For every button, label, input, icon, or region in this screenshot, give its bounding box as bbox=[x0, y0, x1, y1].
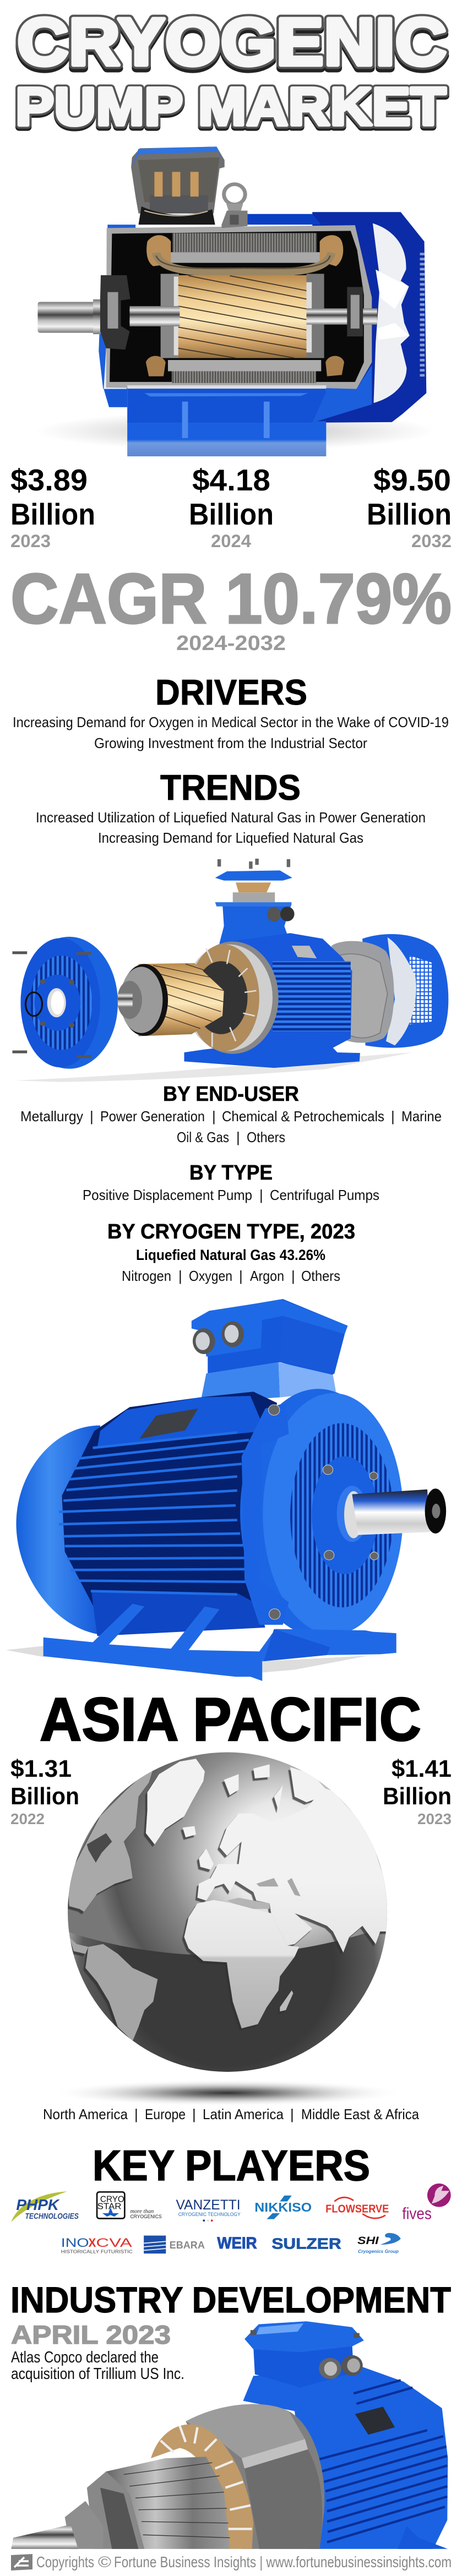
date: April 2023: APRIL 2023 bbox=[11, 2320, 171, 2349]
other regions: | bbox=[290, 2106, 294, 2122]
body bbox=[62, 1391, 277, 1619]
heading: key players: KEY PLAYERS bbox=[93, 2141, 370, 2190]
end-user segments: Metallurgy bbox=[20, 1108, 83, 1125]
logo: Vanzetti: CRYOGENIC TECHNOLOGY bbox=[178, 2212, 241, 2217]
stat: 2032 market size: 2032 bbox=[411, 531, 452, 551]
base bbox=[184, 1039, 360, 1068]
stat: 2022 regional value: Billion bbox=[10, 1783, 79, 1810]
logo: Cryostar: more than bbox=[131, 2208, 154, 2214]
end-user segments: Others bbox=[247, 1129, 285, 1145]
panel: by end-user bbox=[20, 1083, 442, 1145]
end-user segments: | bbox=[236, 1129, 240, 1145]
end-user segments: Marine bbox=[401, 1108, 442, 1125]
type segments: Positive Displacement Pump bbox=[83, 1187, 252, 1203]
base bbox=[44, 1604, 396, 1681]
terminal box bbox=[253, 2343, 354, 2388]
nameplate bbox=[355, 2406, 395, 2435]
development text: Atlas Copco declared the bbox=[11, 2349, 159, 2366]
shaft bbox=[337, 1486, 367, 1542]
stat: 2024 market size: Billion bbox=[189, 497, 274, 531]
title line 2: PUMP MARKET: PUMP MARKET bbox=[15, 79, 446, 139]
stat: 2024 market size: $4.18 bbox=[192, 463, 270, 497]
cryogen segments bbox=[122, 1268, 340, 1284]
leading segment share: Liquefied Natural Gas 43.26% bbox=[136, 1247, 325, 1263]
title line 1: CRYOGENIC: CRYOGENIC bbox=[17, 4, 447, 79]
base bbox=[312, 365, 372, 423]
stator bbox=[187, 942, 279, 1054]
stat: 2032 market size bbox=[367, 463, 452, 551]
stat: 2022 regional value: $1.31 bbox=[10, 1755, 72, 1782]
other regions: Europe bbox=[145, 2106, 186, 2122]
globe bbox=[68, 1753, 388, 2104]
logo: Flowserve bbox=[325, 2197, 389, 2218]
logo: Ebara bbox=[144, 2236, 205, 2253]
fan cover bbox=[362, 934, 448, 1048]
fan cover bbox=[16, 1426, 100, 1635]
icon: Fortune Business Insights logo bbox=[11, 2554, 32, 2570]
type segments: Centrifugal Pumps bbox=[270, 1187, 379, 1203]
logo: Fives: fives bbox=[402, 2205, 432, 2223]
logo: Cryostar: STAR bbox=[97, 2201, 121, 2211]
stat: 2024 market size: 2024 bbox=[211, 531, 251, 551]
other regions: North America bbox=[43, 2106, 128, 2122]
cryogen segments: Argon bbox=[250, 1268, 284, 1284]
logo: Sulzer: SULZER bbox=[271, 2235, 341, 2252]
stat: 2023 market size bbox=[10, 463, 95, 551]
stat: 2023 regional value bbox=[383, 1755, 452, 1827]
terminal box bbox=[208, 1299, 347, 1376]
logo: Cryostar bbox=[97, 2192, 162, 2220]
fan bbox=[373, 223, 410, 403]
title line 2: PUMP MARKET: PUMP MARKET bbox=[15, 77, 446, 137]
logo: Inox CVA: HISTORICALLY FUTURISTIC bbox=[61, 2249, 133, 2255]
terminal box bbox=[131, 146, 225, 214]
end shield bbox=[20, 937, 118, 1069]
body bbox=[243, 2367, 448, 2549]
development text bbox=[11, 2349, 184, 2383]
stat: 2023 regional value: $1.41 bbox=[392, 1755, 452, 1782]
cryogen segments: | bbox=[239, 1268, 243, 1284]
trends text bbox=[36, 809, 426, 846]
end-user segments: | bbox=[212, 1108, 216, 1125]
stat: 2022 regional value: 2022 bbox=[10, 1810, 45, 1827]
logo: Cryostar: CRYO bbox=[100, 2195, 124, 2204]
end-user segments bbox=[20, 1108, 442, 1145]
development text: acquisition of Trillium US Inc. bbox=[11, 2365, 184, 2383]
terminal box bbox=[220, 904, 292, 943]
rotor bbox=[161, 274, 179, 358]
logo: SHI Cryogenics Group bbox=[357, 2233, 401, 2254]
logo: SHI Cryogenics Group: SHI bbox=[357, 2235, 379, 2247]
stat: 2032 market size: Billion bbox=[367, 497, 452, 531]
heading: by cryogen type: BY CRYOGEN TYPE, 2023 bbox=[107, 1220, 355, 1243]
cryogen segments: | bbox=[291, 1268, 295, 1284]
key player logos bbox=[11, 2184, 451, 2255]
cryogen segments: | bbox=[178, 1268, 182, 1284]
logo: Inox CVA: X bbox=[89, 2236, 96, 2250]
logo: Flowserve: FLOWSERVE bbox=[325, 2203, 389, 2215]
title line 1: CRYOGENIC: CRYOGENIC bbox=[17, 4, 447, 79]
heading: drivers: DRIVERS bbox=[155, 672, 307, 712]
logo: Nikkiso bbox=[254, 2196, 312, 2219]
stator bottom bbox=[168, 360, 321, 371]
logo: Inox CVA: CVA bbox=[96, 2236, 132, 2250]
stat: 2023 market size: Billion bbox=[10, 497, 95, 531]
copper windings bbox=[151, 2425, 253, 2549]
drivers text: Growing Investment from the Industrial Sector bbox=[94, 735, 367, 751]
stator bbox=[186, 2404, 324, 2549]
copyright line: Copyrights bbox=[36, 2553, 94, 2570]
other regions: | bbox=[192, 2106, 196, 2122]
trends text: Increasing Demand for Liquefied Natural Gas bbox=[98, 829, 363, 846]
end-user segments: Oil & Gas bbox=[177, 1129, 229, 1145]
globe shadow bbox=[51, 2080, 404, 2106]
logo: Ebara: EBARA bbox=[170, 2240, 205, 2251]
other regions: Latin America bbox=[203, 2106, 284, 2122]
logo: PHPK Technologies: PHPK bbox=[16, 2196, 60, 2213]
image: motor with rotor partly removed bbox=[11, 2321, 448, 2549]
heading: by type: BY TYPE bbox=[189, 1161, 273, 1185]
rotor bbox=[138, 963, 224, 1036]
logo: PHPK Technologies bbox=[11, 2191, 79, 2222]
logo: Inox CVA: INO bbox=[61, 2236, 89, 2250]
nameplate bbox=[139, 1409, 198, 1439]
other regions bbox=[43, 2106, 419, 2122]
end-user segments: | bbox=[391, 1108, 395, 1125]
logo: SHI Cryogenics Group: Cryogenics Group bbox=[358, 2249, 399, 2254]
copyright line: © bbox=[98, 2553, 111, 2570]
heading: asia pacific: ASIA PACIFIC bbox=[40, 1685, 421, 1754]
title bbox=[15, 4, 447, 139]
panel: by cryogen type bbox=[107, 1220, 355, 1284]
stat: 2023 market size: 2023 bbox=[10, 531, 51, 551]
title line 1: CRYOGENIC: CRYOGENIC bbox=[17, 8, 447, 83]
title line 2: PUMP MARKET: PUMP MARKET bbox=[15, 77, 446, 137]
cryogen segments: Others bbox=[301, 1268, 340, 1284]
other regions: Middle East & Africa bbox=[301, 2106, 419, 2122]
other regions: | bbox=[134, 2106, 138, 2122]
type segments: | bbox=[259, 1187, 263, 1203]
body bbox=[220, 933, 352, 1052]
CAGR period: 2024-2032 bbox=[176, 632, 286, 655]
stat: 2032 market size: $9.50 bbox=[373, 463, 451, 497]
image: assembled motor bbox=[6, 1299, 446, 1681]
stator top bbox=[172, 233, 317, 252]
image: cutaway electric motor bbox=[35, 146, 436, 456]
heading: trends: TRENDS bbox=[160, 767, 301, 807]
flange bbox=[240, 1389, 396, 1636]
logo: Vanzetti bbox=[176, 2198, 241, 2222]
heading: by end-user: BY END-USER bbox=[163, 1083, 299, 1106]
bearings bbox=[100, 275, 131, 350]
shaft bbox=[129, 306, 180, 326]
panel: by type bbox=[83, 1161, 379, 1203]
continents bbox=[68, 1759, 390, 2041]
base bbox=[398, 2526, 448, 2549]
cryogen segments: Nitrogen bbox=[122, 1268, 171, 1284]
stat: 2024 market size bbox=[189, 463, 274, 551]
eye bolt bbox=[224, 184, 245, 204]
stat: 2022 regional value bbox=[10, 1755, 79, 1827]
logo: Weir: WEIR bbox=[217, 2234, 257, 2252]
rotor bbox=[106, 2457, 230, 2549]
footer bbox=[11, 2553, 452, 2570]
stat: 2023 regional value: Billion bbox=[383, 1783, 452, 1810]
image: exploded motor bbox=[12, 859, 448, 1082]
end-user segments: Power Generation bbox=[100, 1108, 205, 1125]
type segments bbox=[83, 1187, 379, 1203]
logo: Fives bbox=[402, 2184, 451, 2223]
end-user segments: | bbox=[90, 1108, 94, 1125]
drivers text bbox=[13, 714, 449, 751]
logo: Vanzetti: VANZETTI bbox=[176, 2198, 241, 2213]
logo: Inox CVA bbox=[61, 2236, 133, 2255]
logo: PHPK Technologies: TECHNOLOGIES bbox=[25, 2212, 79, 2221]
stat: 2023 regional value: 2023 bbox=[417, 1810, 452, 1827]
logo: Cryostar: CRYOGENICS bbox=[131, 2214, 162, 2220]
stat: 2023 market size: $3.89 bbox=[10, 463, 88, 497]
logo: Nikkiso: NIKKISO bbox=[254, 2200, 312, 2214]
end-user segments: Chemical & Petrochemicals bbox=[222, 1108, 384, 1125]
cryogen segments: Oxygen bbox=[189, 1268, 232, 1284]
trends text: Increased Utilization of Liquefied Natural Gas in Power Generation bbox=[36, 809, 426, 826]
